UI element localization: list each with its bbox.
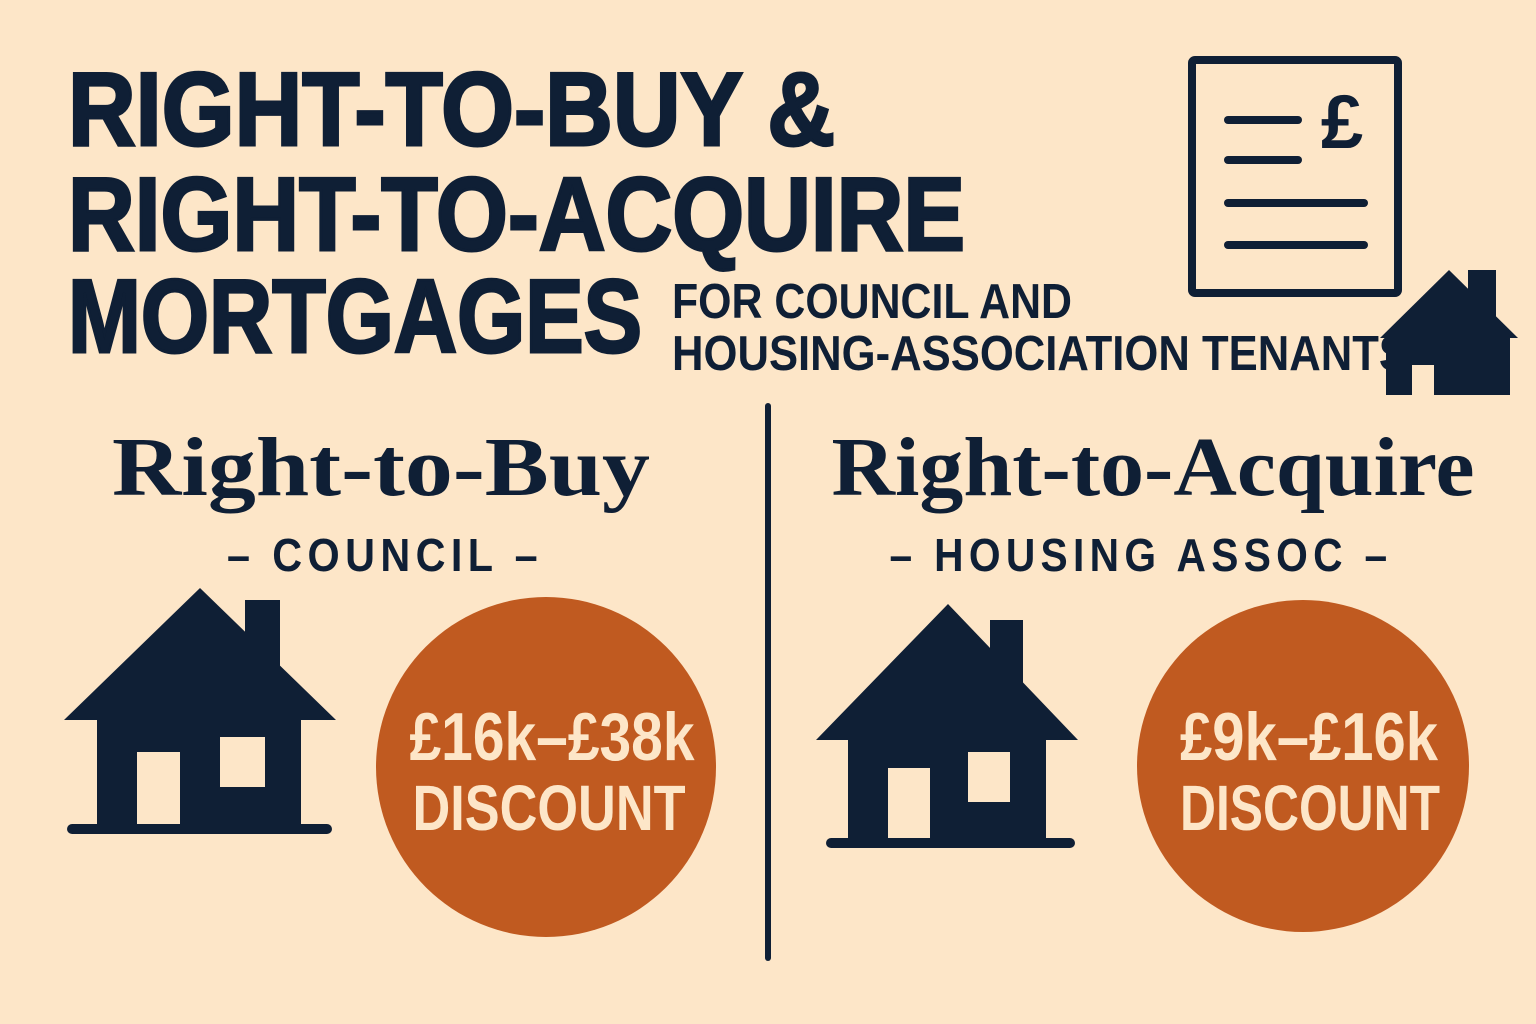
callout: discount circle: [1137, 600, 1469, 932]
icon: small house: [1380, 270, 1518, 395]
heading: Right-to-Buy: Right-to-Buy: [112, 421, 650, 514]
icon: document with pound sign: [1192, 60, 1398, 293]
title: RIGHT-TO-BUY &: [68, 52, 835, 168]
subtitle: [672, 275, 1408, 381]
panel: right-to-acquire: [816, 421, 1474, 932]
icon: house: [64, 588, 336, 834]
subtitle: FOR COUNCIL AND: [672, 275, 1072, 329]
subheading: housing assoc: – HOUSING ASSOC –: [890, 529, 1392, 581]
icon: house: [816, 604, 1078, 848]
title: MORTGAGES: [68, 259, 642, 375]
subheading: council: – COUNCIL –: [227, 529, 543, 581]
callout: discount circle: £16k–£38k: [410, 699, 695, 775]
title: RIGHT-TO-ACQUIRE: [68, 157, 965, 273]
callout: discount circle: DISCOUNT: [412, 772, 686, 844]
divider: [765, 406, 771, 958]
panel: right-to-buy: [64, 421, 716, 937]
callout: discount circle: [376, 597, 716, 937]
icon: document with pound sign: £: [1321, 80, 1363, 165]
heading: Right-to-Acquire: Right-to-Acquire: [832, 421, 1474, 514]
title: [68, 52, 965, 375]
callout: discount circle: £9k–£16k: [1180, 699, 1438, 775]
callout: discount circle: DISCOUNT: [1180, 772, 1440, 844]
subtitle: HOUSING-ASSOCIATION TENANTS: [672, 327, 1408, 381]
